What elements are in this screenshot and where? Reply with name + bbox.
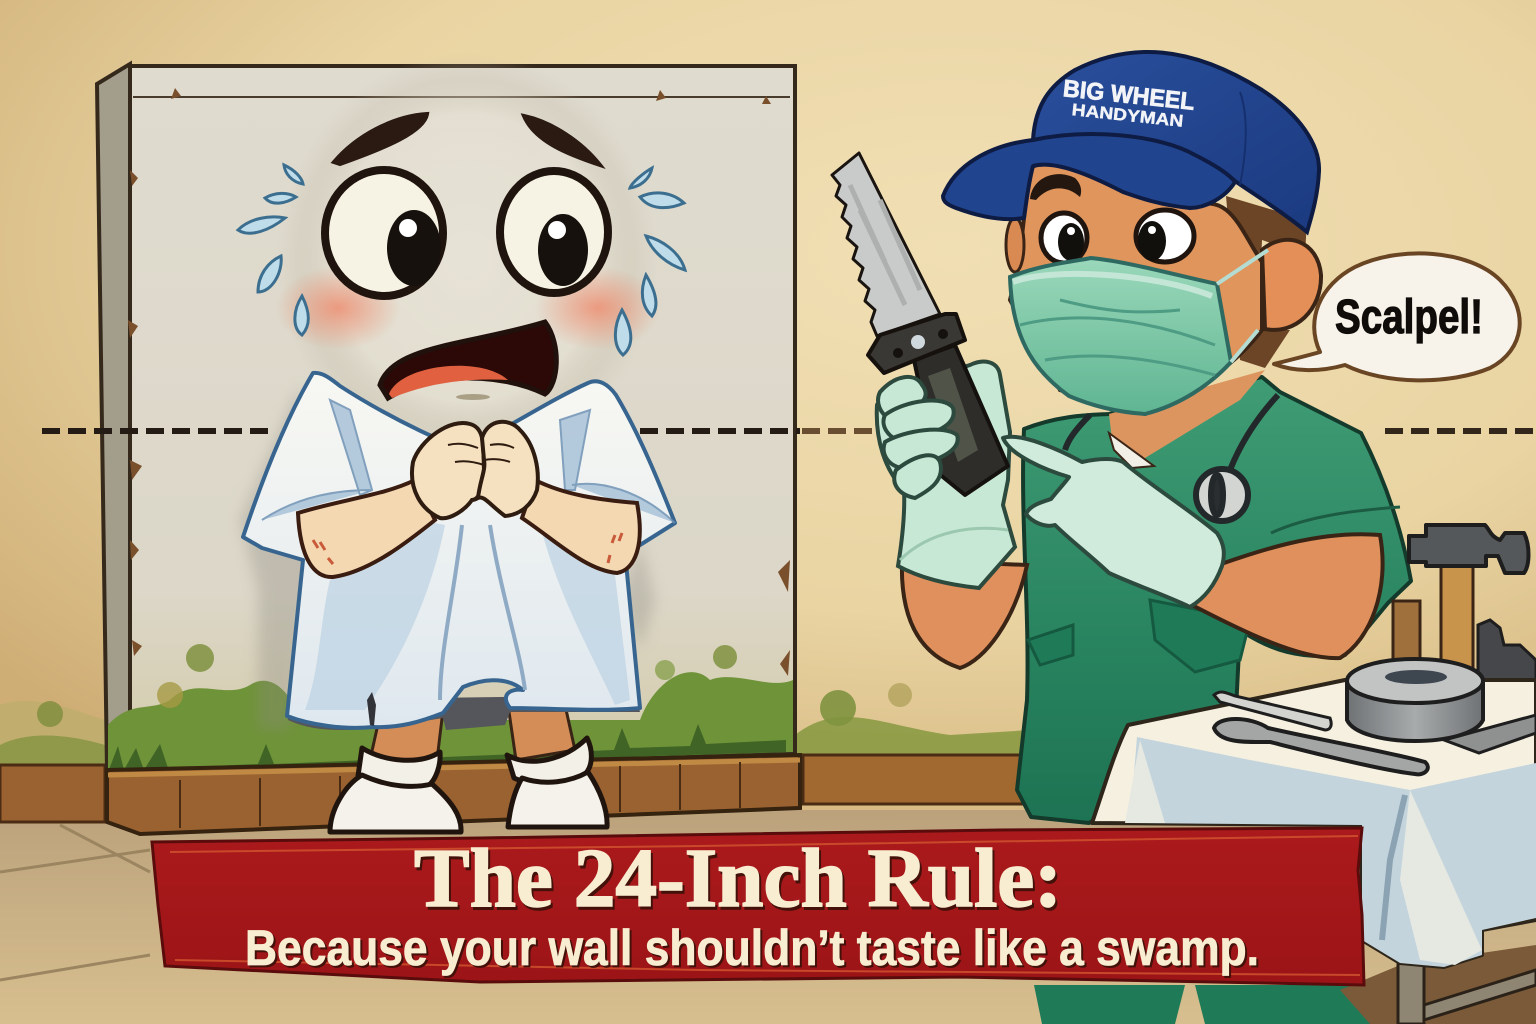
banner xyxy=(152,828,1364,985)
scrapes xyxy=(313,533,622,564)
damaged edges xyxy=(128,88,790,676)
face blush left xyxy=(276,266,400,350)
cap xyxy=(943,52,1319,232)
neck xyxy=(1109,370,1265,466)
saw scalpel xyxy=(832,153,1008,495)
tool rack xyxy=(1478,620,1536,722)
mouth xyxy=(380,322,556,398)
eyebrow left xyxy=(334,114,427,164)
saw handle xyxy=(914,345,1008,495)
fists xyxy=(412,422,538,518)
scrubs torso xyxy=(1017,377,1411,823)
cap: HANDYMAN xyxy=(1071,100,1184,131)
face area xyxy=(277,53,657,463)
shoes xyxy=(330,772,607,832)
cloth shaded drape xyxy=(1130,737,1536,967)
arm right xyxy=(522,480,640,573)
face xyxy=(1010,162,1262,414)
gown dark underside xyxy=(288,695,640,730)
sleeve hem xyxy=(1271,507,1400,533)
hammer xyxy=(1393,525,1528,671)
tears xyxy=(238,165,685,355)
scrub pockets xyxy=(1028,600,1250,672)
arm right xyxy=(1190,534,1383,658)
cloth xyxy=(1092,680,1536,967)
moss on wall right xyxy=(795,683,1030,757)
eyebrow xyxy=(1030,174,1081,200)
screwdriver xyxy=(1214,692,1331,730)
hair xyxy=(1226,196,1307,368)
saw blade xyxy=(832,153,940,336)
gown tear xyxy=(367,692,376,726)
ear right xyxy=(1262,240,1321,330)
chin mark xyxy=(456,394,490,400)
duct tape roll xyxy=(1347,659,1483,741)
arm left xyxy=(902,560,1027,668)
dashed 24-inch line xyxy=(42,428,1536,434)
cap logo: BIG WHEEL xyxy=(1062,75,1196,116)
eyes xyxy=(1041,210,1194,263)
banner subtitle: Because your wall shouldn’t taste like a swamp. xyxy=(245,920,1259,976)
surgical mask xyxy=(1010,250,1268,414)
top seam line xyxy=(133,96,790,98)
undershirt xyxy=(1109,433,1154,468)
drywall front xyxy=(130,66,795,768)
glove fingers xyxy=(878,377,958,498)
character: handyman surgeon xyxy=(832,52,1520,1024)
panel: drywall xyxy=(97,64,795,772)
wooden base xyxy=(107,755,800,834)
wrench xyxy=(1214,719,1428,774)
arm left xyxy=(298,480,435,577)
moss on wall left xyxy=(0,701,105,768)
table legs xyxy=(1340,945,1536,1024)
floor xyxy=(0,810,1536,1024)
legs xyxy=(370,705,575,760)
glove holding xyxy=(877,362,1015,588)
baseboard left xyxy=(0,765,105,822)
eye left xyxy=(325,170,443,296)
socks xyxy=(358,738,591,789)
character: scared drywall patient xyxy=(238,53,685,832)
stethoscope xyxy=(1065,395,1278,521)
eyebrow right xyxy=(524,116,600,165)
gown xyxy=(243,373,675,730)
moss on drywall xyxy=(108,644,793,772)
scrub pants xyxy=(1034,985,1376,1024)
cap brim xyxy=(943,134,1235,219)
ear left xyxy=(1006,218,1024,272)
gown shadow on wall xyxy=(240,385,655,730)
speech bubble xyxy=(1274,253,1520,380)
glove pointing xyxy=(1003,437,1224,607)
saw guard xyxy=(868,314,965,373)
table with cloth xyxy=(1092,680,1536,1024)
banner title: The 24-Inch Rule: xyxy=(414,832,1062,925)
eye right xyxy=(500,171,608,293)
gown folds xyxy=(305,520,630,710)
speech text: Scalpel! xyxy=(1335,291,1483,344)
face blush right xyxy=(536,266,660,350)
baseboard right xyxy=(803,755,1030,804)
tool plate xyxy=(1444,715,1536,753)
drywall side edge xyxy=(97,64,130,770)
